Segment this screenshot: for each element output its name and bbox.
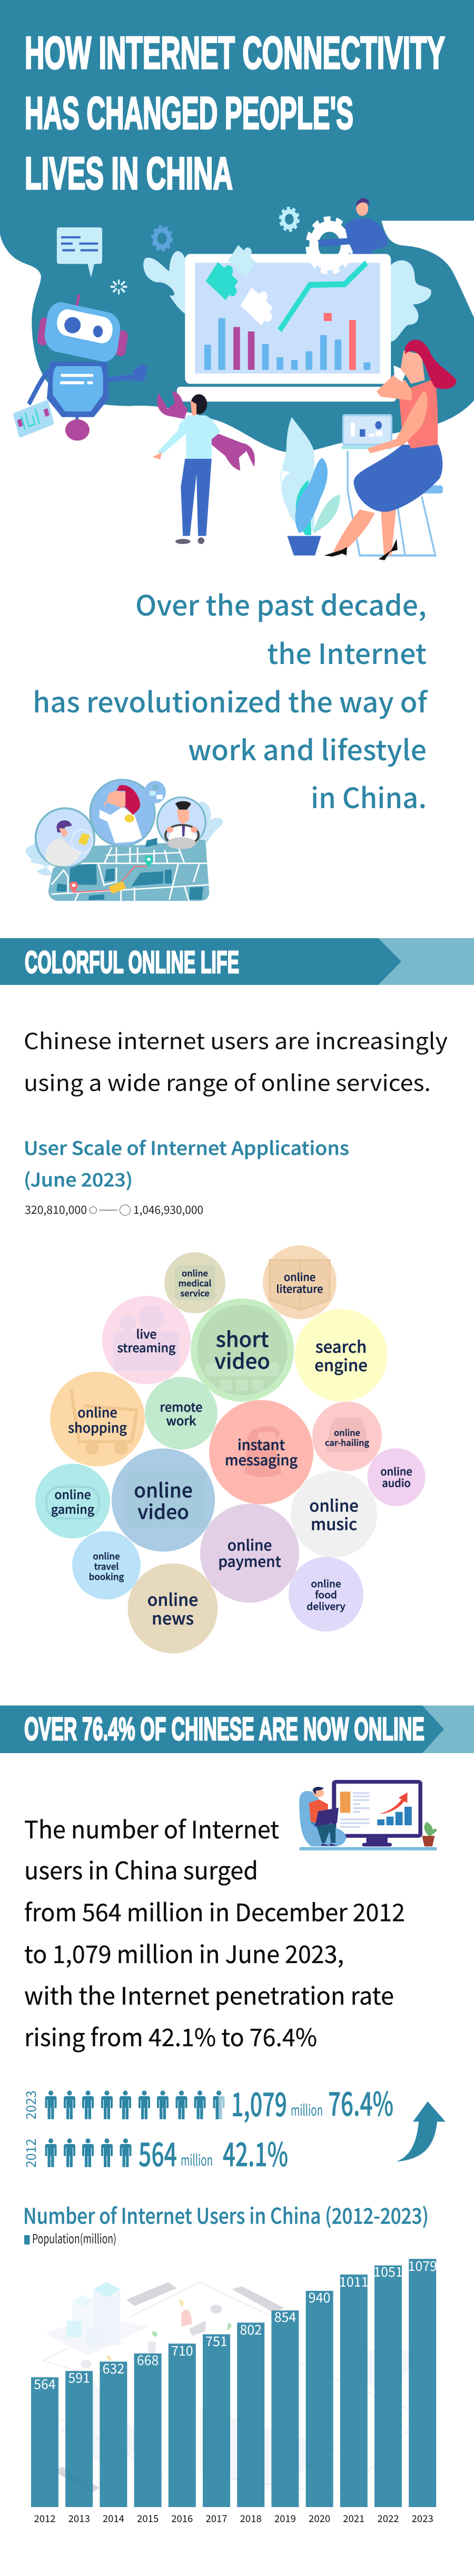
bubble: online medical service: medical <box>179 1276 211 1289</box>
section intro text: Chinese internet users are increasingly <box>24 1024 448 1056</box>
value 564 million: 564 <box>139 2128 177 2176</box>
bubble: remote work: work <box>166 1411 196 1429</box>
bubble: online food delivery <box>289 1557 363 1632</box>
section banner: over 76.4% online <box>0 1706 474 1753</box>
leaf decoration right <box>390 260 431 341</box>
stats text: with the Internet penetration rate <box>24 1977 394 2012</box>
stats text <box>24 1811 405 2054</box>
teal header blob <box>0 0 474 452</box>
bubble: online food delivery: online <box>311 1576 341 1591</box>
bubble: instant messaging <box>209 1400 313 1504</box>
bubble: instant messaging: instant <box>238 1434 285 1454</box>
bubble: online music <box>291 1471 377 1557</box>
intro text: work and lifestyle <box>188 729 427 769</box>
year axis: 2023 <box>412 2512 433 2525</box>
intro text <box>33 584 428 817</box>
size legend: 1,046,930,000 <box>133 1202 203 1217</box>
bubble: online music: music <box>311 1511 357 1535</box>
bubble: online car-hailing <box>312 1402 382 1471</box>
pictogram row: 2023 <box>21 2078 393 2126</box>
bubble: instant messaging: messaging <box>225 1449 298 1470</box>
intro text: Over the past decade, <box>135 584 427 624</box>
size legend <box>25 1202 203 1217</box>
bubble: live streaming <box>102 1296 191 1384</box>
size legend: 320,810,000 <box>25 1202 87 1217</box>
bubble: online car-hailing: car-hailing <box>325 1436 369 1448</box>
bubble: online audio: audio <box>382 1475 411 1490</box>
driver circle <box>157 797 205 849</box>
icon: blue gear <box>152 227 172 250</box>
bubble: online payment: payment <box>218 1551 281 1572</box>
bubble: online literature: literature <box>276 1281 323 1296</box>
bars <box>31 2259 436 2507</box>
puzzle bubble <box>144 781 166 803</box>
bubble: online shopping <box>50 1372 145 1466</box>
intro text: the Internet <box>267 632 427 672</box>
bubble: online news: online <box>147 1587 198 1611</box>
man with wrench <box>153 391 255 544</box>
bubble: online audio <box>368 1448 426 1506</box>
arrow: upward growth <box>396 2101 446 2161</box>
bubble: online video: online <box>134 1475 193 1503</box>
icon: pale gear <box>280 208 299 230</box>
bar values: 668 <box>137 2350 159 2369</box>
bubble: remote work <box>145 1377 218 1450</box>
bubble: online shopping: online <box>77 1403 117 1422</box>
bubble: online medical service <box>164 1252 225 1313</box>
robot <box>13 295 147 441</box>
title: LIVES IN CHINA <box>25 148 233 199</box>
year axis: 2020 <box>309 2512 330 2525</box>
bubble: short video: short <box>216 1323 269 1353</box>
splash leaves <box>26 801 223 876</box>
bar values: 591 <box>68 2368 90 2387</box>
bubble: online news <box>127 1564 218 1653</box>
bubble: online shopping: shopping <box>68 1418 127 1437</box>
bubble: online gaming <box>35 1464 110 1538</box>
icon: sparkle <box>111 280 126 294</box>
section banner: colorful online life <box>0 938 474 985</box>
bar values: 632 <box>103 2359 124 2378</box>
rate 42.1%: 42.1% <box>223 2128 288 2176</box>
bar values: 1011 <box>339 2272 369 2291</box>
banner ribbon <box>0 1706 474 1753</box>
bar values: 802 <box>240 2320 262 2339</box>
chip in hand <box>13 399 54 438</box>
isometric office watermark <box>42 2282 423 2495</box>
year axis: 2022 <box>377 2512 399 2525</box>
bubble: online payment <box>200 1504 299 1603</box>
section intro text: using a wide range of online services. <box>24 1066 431 1098</box>
pictogram row: 2023: million <box>291 2098 323 2120</box>
section intro text <box>24 1024 448 1098</box>
stats text: users in China surged <box>24 1852 258 1887</box>
year label 2023: 2023 <box>21 2090 40 2120</box>
icon: speech bubble <box>57 227 102 278</box>
bubble: online medical service: online <box>182 1266 208 1279</box>
bubble: online medical service: service <box>180 1286 210 1299</box>
bubble: short video <box>191 1299 294 1402</box>
bubble: live streaming: live <box>136 1324 156 1342</box>
bar values: 710 <box>171 2341 193 2360</box>
bubble: search engine: search <box>315 1334 367 1357</box>
woman at desk <box>324 340 457 560</box>
value 1,079 million: 1,079 <box>231 2078 287 2126</box>
bubble chart heading: User Scale of Internet Applications <box>24 1134 349 1161</box>
bubble: remote work: remote <box>160 1397 202 1415</box>
laptop monitor <box>177 240 396 401</box>
trend line <box>280 263 367 330</box>
bubble: live streaming: streaming <box>117 1338 175 1356</box>
bubble: online news: news <box>152 1606 194 1630</box>
bubble: short video: video <box>214 1345 270 1375</box>
bubble: online video <box>112 1448 215 1552</box>
bar values: 940 <box>309 2288 330 2307</box>
bubble chart heading: (June 2023) <box>24 1165 133 1192</box>
bubble: online gaming: online <box>54 1485 91 1503</box>
stats text: from 564 million in December 2012 <box>24 1894 405 1929</box>
year axis: 2018 <box>240 2512 262 2525</box>
bar chart <box>31 2256 437 2525</box>
operator circle <box>90 780 155 846</box>
year axis: 2015 <box>137 2512 159 2525</box>
pictogram row: 2012 <box>21 2128 288 2176</box>
bar values: 854 <box>274 2307 296 2326</box>
chart legend <box>24 2229 116 2247</box>
bar values: 751 <box>205 2331 228 2350</box>
bubble chart heading <box>24 1134 349 1192</box>
year label 2012: 2012 <box>21 2139 40 2168</box>
banner heading: COLORFUL ONLINE LIFE <box>25 945 239 980</box>
intro text: has revolutionized the way of <box>33 681 428 721</box>
bubble: online food delivery: delivery <box>307 1599 345 1613</box>
chart legend: Population(million) <box>32 2229 116 2247</box>
year axis: 2012 <box>34 2512 56 2525</box>
pictogram row: 2012: million <box>181 2148 213 2170</box>
bubble: online travel booking: booking <box>89 1569 124 1583</box>
stats text: rising from 42.1% to 76.4% <box>24 2019 317 2054</box>
year axis: 2016 <box>171 2512 193 2525</box>
taxi hailing illustration <box>26 780 223 901</box>
bubble: search engine: engine <box>314 1352 368 1376</box>
bubble: online travel booking: online <box>93 1549 120 1562</box>
rate 76.4%: 76.4% <box>328 2078 393 2125</box>
bubble: search engine <box>295 1309 388 1402</box>
bubble: online music: online <box>309 1493 359 1516</box>
bubble: online gaming: gaming <box>51 1500 94 1517</box>
bubble: online travel booking <box>72 1531 141 1599</box>
year axis: 2014 <box>103 2512 124 2525</box>
year axis: 2019 <box>274 2512 296 2525</box>
year axis: 2017 <box>205 2512 228 2525</box>
bubble: online literature: online <box>284 1269 315 1284</box>
icon: analyst at monitor <box>299 1780 437 1850</box>
hero illustration <box>0 0 474 560</box>
bubble: online food delivery: food <box>315 1587 337 1602</box>
intro text: in China. <box>311 777 427 817</box>
city map <box>48 838 209 901</box>
bar chart on screen <box>204 313 370 370</box>
man with blue sweater <box>318 198 388 254</box>
white gear <box>308 219 351 272</box>
banner ribbon <box>0 938 474 985</box>
bar values: 1079 <box>408 2256 437 2275</box>
leaf decoration left <box>143 251 193 317</box>
potted plant <box>281 417 340 556</box>
bubble: online travel booking: travel <box>94 1559 118 1572</box>
bubble: online payment: online <box>228 1534 272 1555</box>
year axis: 2013 <box>68 2512 90 2525</box>
bubble: online car-hailing: online <box>334 1426 360 1438</box>
stats text: The number of Internet <box>24 1811 279 1846</box>
puzzle pieces <box>206 257 245 304</box>
bar values <box>34 2256 437 2393</box>
bubble: online video: video <box>137 1496 189 1525</box>
passenger circle <box>36 808 94 867</box>
year axis: 2021 <box>343 2512 364 2525</box>
stats text: to 1,079 million in June 2023, <box>24 1936 344 1970</box>
bubble: online literature <box>263 1245 337 1319</box>
bar values: 564 <box>34 2374 56 2393</box>
bubble chart <box>35 1245 426 1653</box>
bar values: 1051 <box>373 2262 403 2281</box>
bubble: online audio: online <box>380 1463 412 1478</box>
title <box>25 28 445 199</box>
year axis <box>34 2512 433 2525</box>
